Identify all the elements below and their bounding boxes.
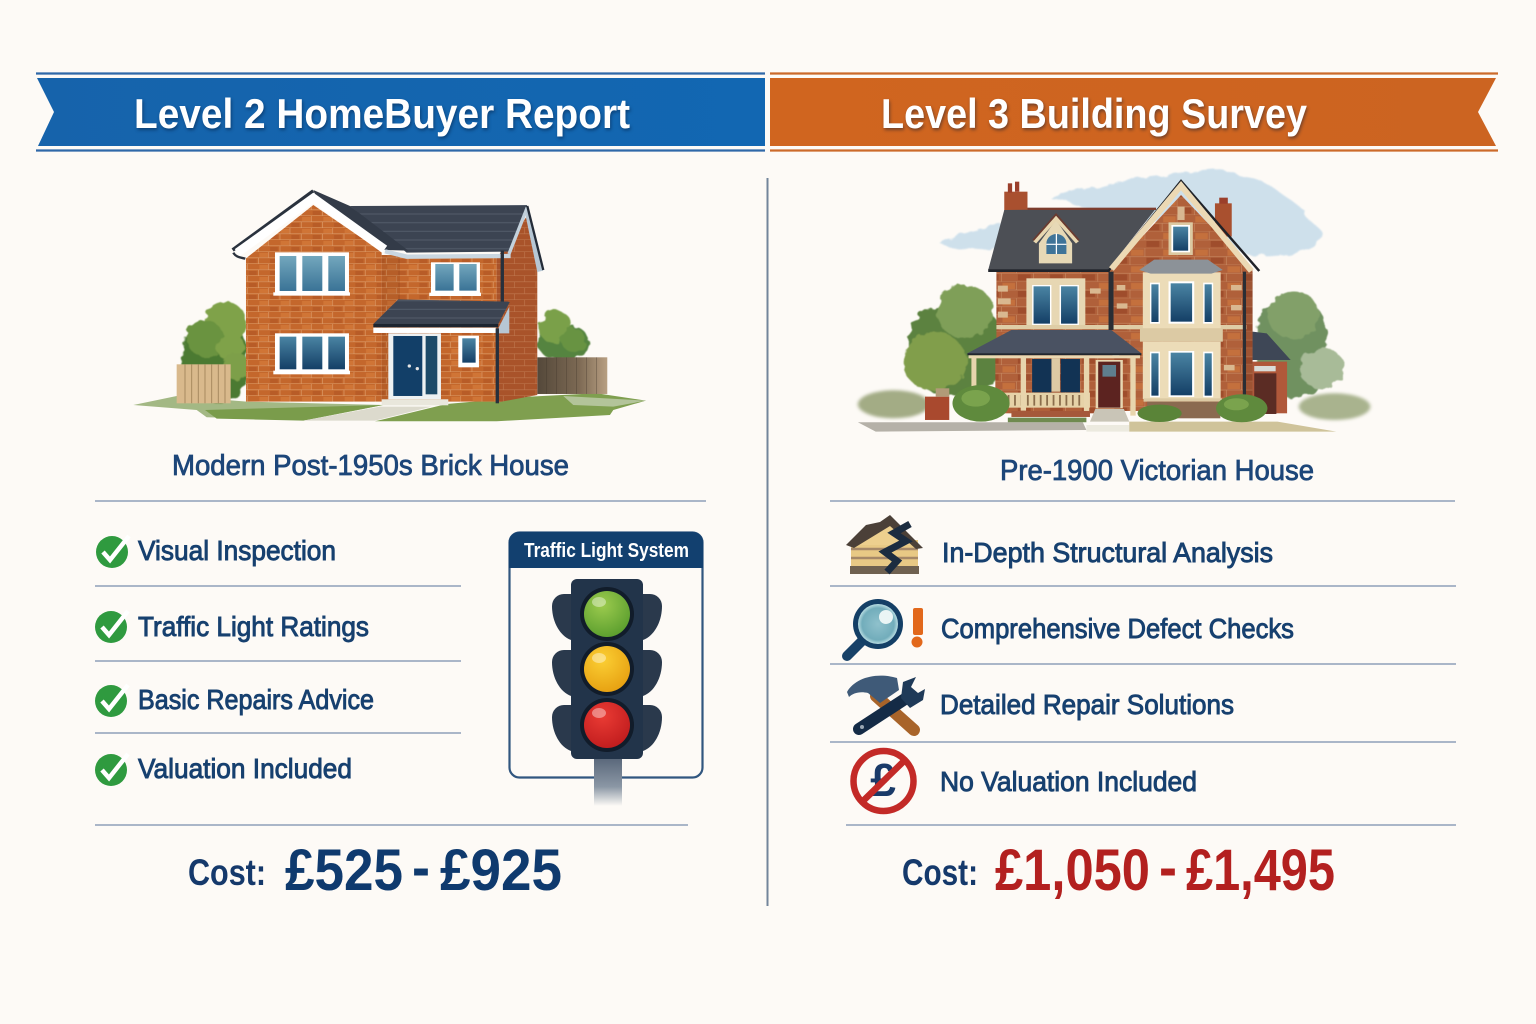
panel: Level 3 Building Survey bbox=[830, 170, 1456, 903]
item: defect checks bbox=[847, 599, 1294, 656]
cost: level 2 bbox=[188, 835, 562, 903]
illustration: modern brick house bbox=[133, 190, 646, 421]
cost: level 3: - bbox=[1159, 835, 1177, 900]
item: structural analysis bbox=[846, 515, 1273, 574]
icon: magnifying glass with exclamation bbox=[847, 599, 923, 656]
cost: level 3 bbox=[902, 835, 1335, 903]
icon: cracked house bbox=[846, 515, 923, 574]
banner left: Level 2 ribbon bbox=[37, 78, 765, 146]
item: structural analysis: In-Depth Structural Analysis bbox=[942, 537, 1273, 568]
icon: no pound sign bbox=[854, 751, 914, 811]
cost: level 2: £525 bbox=[285, 838, 403, 903]
cost: level 2: £925 bbox=[440, 838, 562, 903]
item: valuation included: Valuation Included bbox=[138, 753, 352, 784]
icon: no pound sign: £ bbox=[870, 754, 896, 806]
illustration: Victorian house bbox=[858, 170, 1370, 432]
item: traffic light ratings: Traffic Light Ratings bbox=[138, 611, 369, 642]
center divider bbox=[766, 178, 768, 906]
traffic light card bbox=[509, 532, 703, 806]
icon: hammer and wrench bbox=[847, 676, 925, 730]
cost: level 3: Cost: bbox=[902, 852, 978, 893]
item: no valuation: No Valuation Included bbox=[940, 766, 1197, 797]
item: basic repairs advice: Basic Repairs Advice bbox=[138, 684, 374, 715]
banner right: Level 3 ribbon: Level 3 Building Survey bbox=[881, 90, 1308, 137]
cost: level 2: - bbox=[412, 835, 430, 900]
banner right: Level 3 ribbon bbox=[770, 78, 1496, 146]
panel: Level 2 HomeBuyer Report bbox=[95, 190, 706, 903]
item: repair solutions bbox=[847, 676, 1234, 730]
icon: traffic light bbox=[552, 579, 662, 806]
feature list bbox=[830, 515, 1456, 811]
item: no valuation bbox=[854, 751, 1197, 811]
cost: level 3: £1,495 bbox=[1186, 838, 1335, 903]
traffic light card: Traffic Light System bbox=[524, 540, 689, 562]
banner left: Level 2 ribbon: Level 2 HomeBuyer Report bbox=[134, 90, 630, 137]
banner: report titles bbox=[36, 74, 1498, 150]
caption: modern house: Modern Post-1950s Brick House bbox=[172, 450, 569, 482]
checklist bbox=[95, 535, 461, 786]
caption: Victorian house: Pre-1900 Victorian House bbox=[1000, 455, 1314, 487]
cost: level 2: Cost: bbox=[188, 852, 266, 893]
cost: level 3: £1,050 bbox=[995, 838, 1150, 903]
item: visual inspection: Visual Inspection bbox=[138, 535, 336, 566]
item: repair solutions: Detailed Repair Solutions bbox=[940, 689, 1234, 720]
item: defect checks: Comprehensive Defect Checks bbox=[941, 613, 1294, 644]
